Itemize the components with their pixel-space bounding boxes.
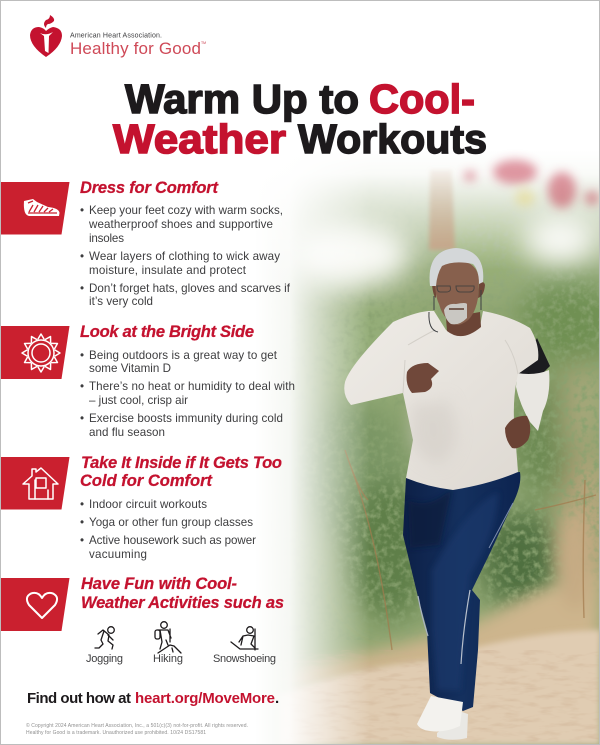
bullet list: • <box>80 204 84 217</box>
armband <box>517 338 550 376</box>
icon: jogging <box>95 627 114 649</box>
ears <box>432 282 485 298</box>
heading line 2: Cold for Comfort <box>80 472 214 490</box>
torso and left sleeve <box>344 311 538 490</box>
dirt trail <box>280 630 600 745</box>
heading line 2: Weather Activities such as <box>81 594 284 612</box>
label: Jogging <box>86 653 123 665</box>
bullet list: vacuuming <box>89 548 147 561</box>
logo heart and torch <box>30 15 62 57</box>
logo: Healthy for Good: Healthy for Good <box>70 39 201 58</box>
bullet list: Yoga or other fun group classes <box>89 516 253 529</box>
bullet list: • <box>80 282 84 295</box>
icon: snowshoeing <box>231 627 258 650</box>
front shoe <box>417 696 463 731</box>
photo fade: left <box>255 150 370 744</box>
heading: Look at the Bright Side <box>80 323 254 341</box>
bullet list: Being outdoors is a great way to get <box>89 349 278 362</box>
red tab with shoe icon <box>1 182 70 234</box>
bullet list: • <box>80 498 84 511</box>
bullet list <box>80 349 295 439</box>
call to action: link: heart.org/MoveMore <box>135 690 275 707</box>
bullet list <box>80 204 291 308</box>
call to action <box>27 690 279 707</box>
panel: dress for comfort <box>1 179 291 308</box>
bullet list: • <box>80 380 84 393</box>
glasses <box>437 286 474 292</box>
heading: Dress for Comfort <box>80 179 220 197</box>
mouth <box>449 308 464 310</box>
title line 1 red: Cool- <box>369 76 475 122</box>
bullet list: • <box>80 250 84 263</box>
bullet list: some Vitamin D <box>89 362 171 375</box>
copyright <box>26 722 248 736</box>
red tab with sun icon <box>1 326 70 379</box>
bullet list: Keep your feet cozy with warm socks, <box>89 204 283 217</box>
activity: hiking <box>153 622 183 665</box>
bullet list: Exercise boosts immunity during cold <box>89 412 283 425</box>
photo fade: top <box>250 150 599 310</box>
title <box>113 76 487 162</box>
title line 1: Warm Up to <box>125 76 359 122</box>
right sleeve <box>516 370 549 431</box>
panel: cool-weather activities <box>1 575 284 665</box>
logo: organisation name: American Heart Association. <box>70 32 162 40</box>
activity: snowshoeing <box>213 627 276 665</box>
trousers <box>403 472 520 711</box>
copyright line 1: © Copyright 2024 American Heart Association, Inc., a 501(c)(3) not-for-profit. All rights reserved. <box>26 722 248 729</box>
photo: outdoor trail scenery <box>279 175 599 744</box>
rear shoe <box>437 712 468 740</box>
activity: jogging <box>86 627 123 665</box>
bullet list: • <box>80 412 84 425</box>
right hand <box>505 416 530 448</box>
hair <box>430 248 483 286</box>
bullet list: and flu season <box>89 426 165 439</box>
bullet list: Active housework such as power <box>89 534 256 547</box>
bullet list: Don’t forget hats, gloves and scarves if <box>89 282 291 295</box>
left fist <box>407 363 439 393</box>
bullet list: moisture, insulate and protect <box>89 264 247 277</box>
shirt seams <box>403 330 518 393</box>
bullet list: Indoor circuit workouts <box>89 498 207 511</box>
call to action: period: . <box>275 690 279 707</box>
panel: take it inside <box>1 454 282 561</box>
shirt shading <box>410 395 456 465</box>
heading line 1: Take It Inside if It Gets Too <box>81 454 282 472</box>
logo: trademark: TM <box>201 41 206 45</box>
logo <box>30 15 206 58</box>
bullet list: Wear layers of clothing to wick away <box>89 250 280 263</box>
beard <box>444 303 467 324</box>
bullet list: There’s no heat or humidity to deal with <box>89 380 295 393</box>
runner <box>344 248 550 740</box>
heading line 1: Have Fun with Cool- <box>81 575 238 593</box>
bullet list: insoles <box>89 232 124 245</box>
title line 2 red: Weather <box>113 116 286 162</box>
copyright line 2: Healthy for Good is a trademark. Unauthorized use prohibited. 10/24 DS17581 <box>26 730 206 736</box>
bullet list: • <box>80 349 84 362</box>
bullet list: – just cool, crisp air <box>89 394 188 407</box>
call to action: lead-in: Find out how at <box>27 690 131 707</box>
red tab with heart icon <box>1 578 70 631</box>
trouser highlights and piping <box>408 488 513 690</box>
dry stems <box>345 450 596 650</box>
face <box>435 260 479 325</box>
leaf texture <box>336 235 599 623</box>
title line 2: Workouts <box>298 116 487 162</box>
label: Hiking <box>153 653 183 665</box>
red flowers <box>464 160 599 208</box>
earphone cable <box>429 290 481 332</box>
tree trunk <box>429 170 455 250</box>
panel: look at the bright side <box>1 323 295 439</box>
dry grass <box>290 510 600 690</box>
neck <box>446 312 481 336</box>
hazy sky gaps <box>290 216 596 289</box>
icon: hiking <box>155 622 181 653</box>
bullet list: • <box>80 534 84 547</box>
label: Snowshoeing <box>213 653 276 665</box>
bullet list: • <box>80 516 84 529</box>
bullet list: weatherproof shoes and supportive <box>88 218 273 231</box>
red tab with house icon <box>1 457 70 510</box>
bullet list <box>80 498 256 561</box>
bullet list: it’s very cold <box>89 295 153 308</box>
